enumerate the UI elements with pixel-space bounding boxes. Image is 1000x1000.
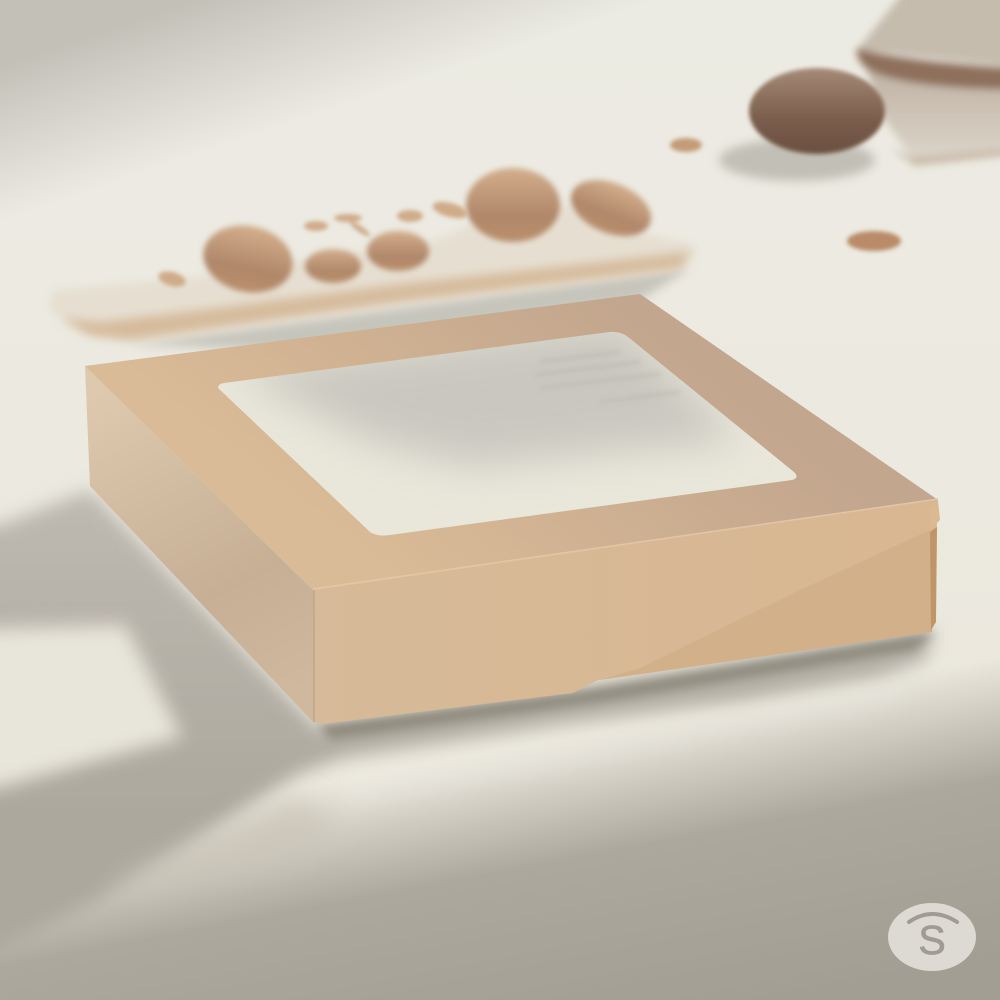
box front side: [313, 500, 938, 724]
light streak highlight: [345, 690, 900, 815]
icon: dome: [305, 249, 361, 283]
box side strip: [930, 527, 937, 630]
light streak: dim left tail: [100, 795, 340, 890]
icon: dome: [197, 217, 299, 301]
box corner fold: [313, 590, 315, 722]
icon: dome: [563, 169, 659, 247]
icon: dome: [466, 168, 560, 242]
panel: kraft box: [85, 294, 940, 724]
icon: small dots: [157, 199, 469, 289]
panel: blurred tray with domes: [49, 168, 697, 350]
box lid top: [85, 294, 938, 590]
shadow: left and under box: [0, 490, 935, 990]
box inner flap: [600, 530, 932, 680]
window reflection lines: [673, 392, 678, 394]
shadow: top left: [0, 0, 1000, 300]
shadow: stone: [719, 139, 875, 181]
icon: pebble: [847, 231, 901, 251]
icon: pebble: [670, 138, 702, 152]
light patch: left: [0, 625, 182, 800]
box window: [218, 332, 796, 536]
shadow: box contact: [318, 632, 935, 740]
crease highlight: [313, 499, 938, 589]
shadow: bottom band: [0, 600, 1000, 1000]
box flap tip: [930, 500, 940, 530]
icon: logo: [888, 903, 976, 971]
box left side: [85, 366, 313, 722]
panel: blurred slab: [857, 0, 1000, 166]
icon: stone: [749, 68, 885, 154]
icon: logo: S: [918, 917, 946, 963]
blurred objects: top right: [670, 0, 1000, 251]
icon: dome: [367, 231, 429, 271]
